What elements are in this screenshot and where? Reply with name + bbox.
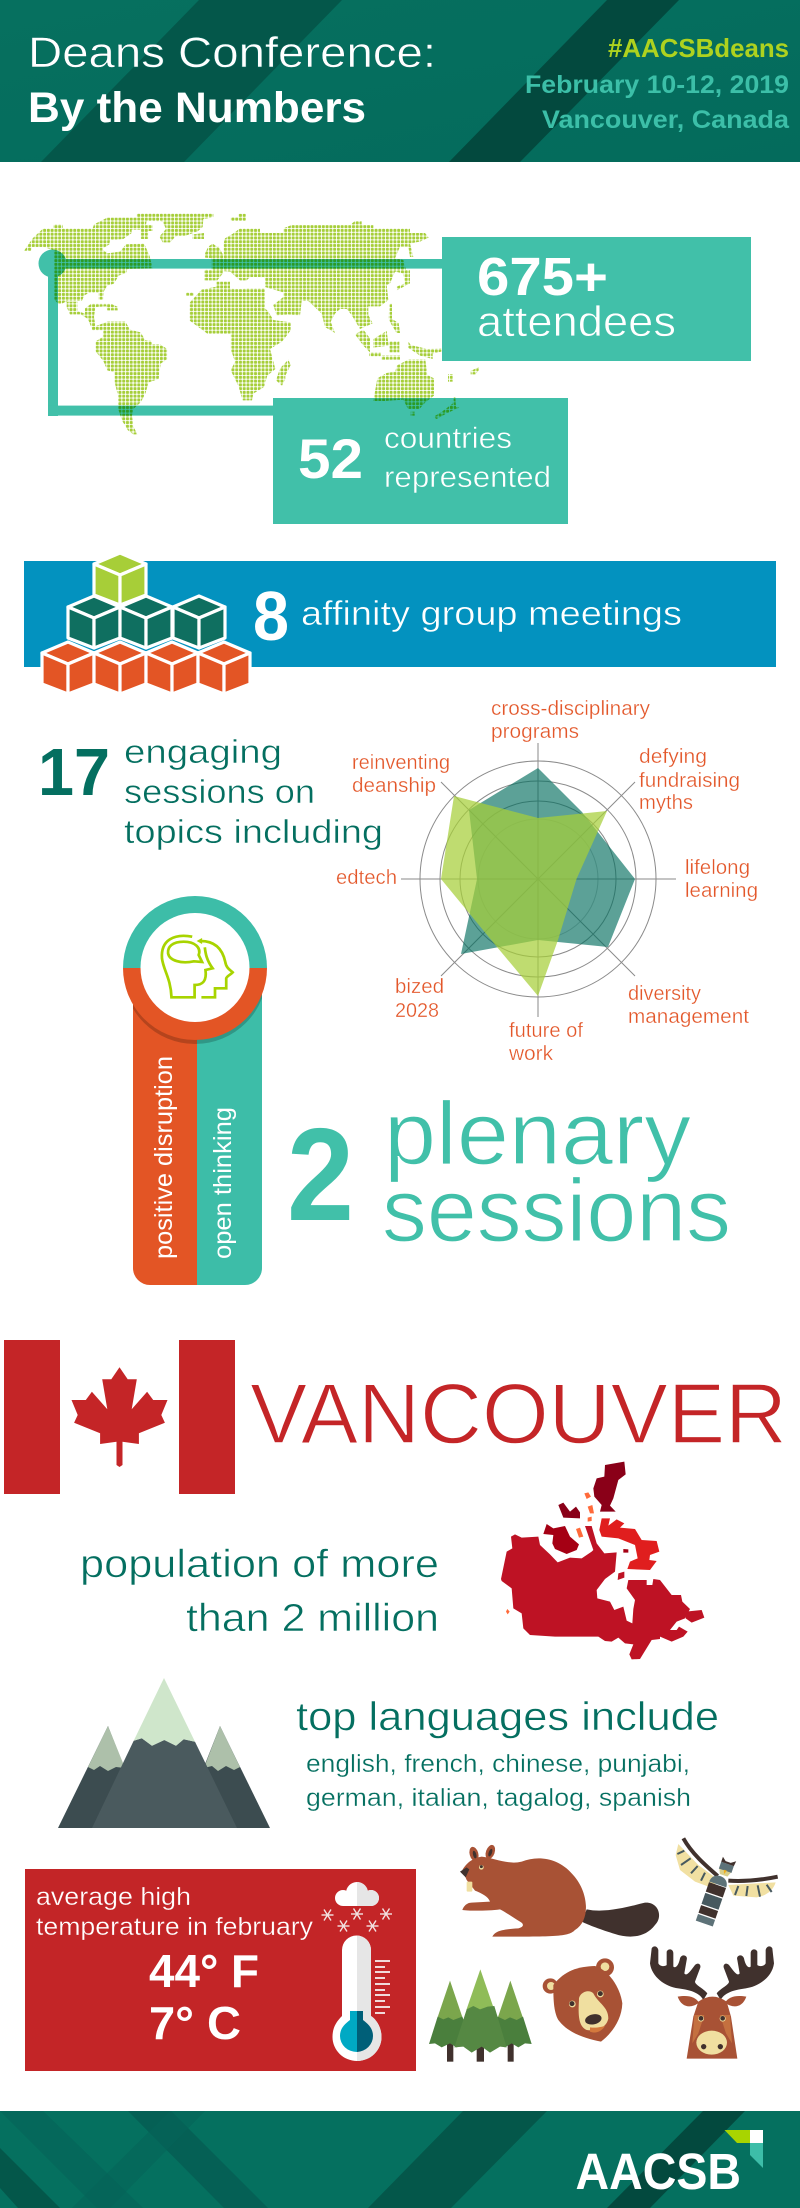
ring	[123, 896, 267, 1040]
ribbon	[133, 994, 262, 1285]
radar labels: bized	[395, 976, 444, 998]
radar labels: future of	[509, 1020, 583, 1042]
radar labels: lifelong	[685, 857, 750, 879]
event details: Vancouver, Canada	[542, 106, 790, 134]
radar labels: deanship	[352, 775, 436, 797]
panel: attendance and world map	[24, 213, 751, 524]
attendees box	[442, 237, 751, 361]
languages text: english, french, chinese, punjabi,	[306, 1750, 690, 1778]
panel: plenary badge	[123, 896, 267, 1285]
event details: #AACSBdeans	[608, 33, 789, 63]
footer banner	[0, 2111, 800, 2208]
radar labels: cross-disciplinary	[491, 698, 650, 720]
affinity text: 8	[253, 577, 289, 655]
icon: totem bird	[676, 1838, 778, 1926]
radar labels	[336, 698, 758, 1065]
icon: moose	[650, 1946, 774, 2059]
radar series: lime	[441, 796, 607, 996]
icon: mountains	[58, 1678, 270, 1828]
radar labels: defying	[639, 746, 707, 768]
attendees box: 675+	[477, 247, 608, 307]
languages text: german, italian, tagalog, spanish	[306, 1784, 691, 1812]
plenary sessions heading	[287, 1083, 731, 1260]
affinity text: affinity group meetings	[301, 595, 682, 633]
countries box	[273, 398, 568, 524]
radar labels: learning	[685, 880, 758, 902]
temperature text: 44° F	[149, 1945, 259, 1997]
radar labels: management	[628, 1006, 749, 1028]
radar labels: myths	[639, 792, 693, 814]
countries box: countries	[384, 422, 512, 455]
panel: engaging sessions text	[38, 733, 383, 850]
radar labels: 2028	[395, 1000, 439, 1022]
icon: two heads with arrows	[162, 936, 233, 997]
temperature text: 7° C	[149, 1997, 241, 2049]
title: By the Numbers	[28, 84, 366, 132]
affinity text	[253, 577, 682, 655]
radar grid	[401, 743, 676, 1017]
temperature text: average high	[36, 1883, 191, 1911]
temperature text: temperature in february	[36, 1913, 314, 1941]
panel: temperature	[25, 1869, 416, 2071]
icon: cloud with snow	[322, 1882, 392, 1932]
map of Canada	[501, 1462, 704, 1659]
connector line	[38, 250, 444, 416]
event details: February 10-12, 2019	[525, 71, 789, 99]
radar labels: fundraising	[639, 770, 740, 792]
AACSB logo: AACSB	[576, 2143, 741, 2200]
countries box: 52	[298, 427, 363, 490]
title: Deans Conference:	[28, 29, 436, 77]
heading: Vancouver: VANCOUVER	[250, 1367, 787, 1462]
dotted world map	[24, 213, 479, 434]
temperature text	[36, 1883, 314, 2049]
event details	[525, 33, 790, 134]
panel: affinity group meetings	[24, 553, 776, 694]
languages text	[296, 1695, 719, 1812]
panel: engaging sessions text: 17	[38, 735, 110, 810]
radar labels: reinventing	[352, 752, 450, 774]
countries box: represented	[384, 461, 551, 494]
plenary sessions heading: sessions	[382, 1160, 731, 1260]
plenary topics: open thinking	[209, 1107, 237, 1259]
plenary topics	[150, 1056, 237, 1259]
population text: population of more	[80, 1543, 439, 1586]
header banner	[0, 0, 800, 162]
radar labels: work	[508, 1043, 554, 1065]
languages text: top languages include	[296, 1695, 719, 1739]
icon: beaver	[460, 1844, 659, 1937]
plenary topics: positive disruption	[150, 1056, 178, 1259]
radar labels: edtech	[336, 867, 397, 889]
icon: trees	[429, 1969, 532, 2062]
title	[28, 29, 436, 132]
plenary sessions heading: plenary	[384, 1083, 692, 1183]
population text	[80, 1543, 439, 1640]
radar chart	[336, 698, 758, 1065]
Canadian flag	[4, 1340, 235, 1494]
icon: bear	[543, 1958, 622, 2042]
plenary sessions heading: 2	[287, 1101, 354, 1248]
attendees box: attendees	[477, 298, 676, 346]
panel: engaging sessions text: topics including	[124, 813, 383, 850]
panel: engaging sessions text: sessions on	[124, 773, 315, 810]
radar labels: diversity	[628, 983, 701, 1005]
population text: than 2 million	[186, 1597, 439, 1640]
panel: engaging sessions text: engaging	[124, 733, 282, 770]
icon: stacked cubes	[42, 553, 250, 694]
radar series: teal	[461, 768, 635, 954]
radar labels: programs	[491, 721, 579, 743]
icon: thermometer	[332, 1936, 390, 2061]
